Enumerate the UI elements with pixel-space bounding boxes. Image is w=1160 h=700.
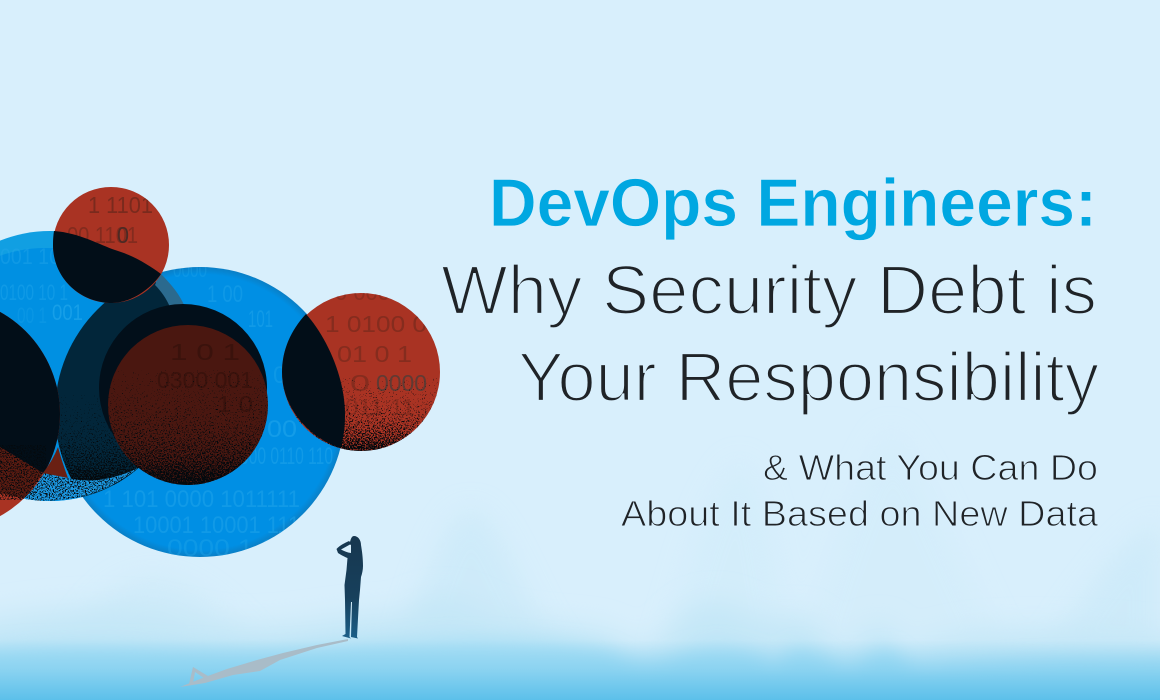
title [441,165,1099,416]
binary digits on big blue: 10001 10001 111 [133,512,300,539]
top red circle: 00 1101 [67,222,138,248]
left blue circle [0,231,105,501]
right red circle: 0000 [376,370,427,396]
figure shadow [180,639,348,687]
far left red circle [0,312,60,516]
big blue circle [55,267,345,557]
heading line 2: Why Security Debt is [441,251,1097,329]
binary digits on left blue [0,248,82,323]
subtitle line 1: & What You Can Do [763,447,1098,488]
top red circle [53,187,169,303]
top red circle: 1 1101 [88,192,153,218]
binary digits on left blue: 001 10 [0,244,60,269]
small red sliver [43,447,68,478]
binary digits on big blue: 101 [248,306,273,333]
binary digits on big blue: 1 00 [207,281,243,308]
binary digits on big blue: 000 0110 110 [240,443,333,470]
binary digits on big blue: 00 [267,416,297,443]
ground mist waves [0,599,1160,700]
centre dark shadow circle [99,304,267,435]
subtitle [621,447,1099,534]
subtitle line 2: About It Based on New Data [621,493,1099,534]
binary digits on left blue: 0100 10 1 [0,280,68,305]
binary digits on big blue: 0 [273,362,286,389]
right red circle: 01 0 1 [337,341,412,367]
circle cluster [0,187,442,562]
right red circle [282,293,440,451]
right red circle: 0 [350,370,370,396]
binary digits on left blue: 00 1 [17,303,47,328]
binary digits on big blue: 0000 [173,260,207,282]
faint misty mountains [60,430,1160,660]
right red circle: 011 11 [345,394,415,420]
binary digits on big blue [103,260,333,562]
digit accent: 0 [117,222,129,248]
binary digits on big blue: 0000 1 0 [167,535,277,562]
right red circle: 1 0100 0 [325,311,427,337]
binary digits on big blue: 1 101 0000 1011111 [103,486,300,513]
heading line 3: Your Responsibility [518,338,1099,416]
centre red circle: 1 0 1 [170,339,240,365]
stipple on overlap [58,395,138,485]
binary digits on left blue: 001 [52,300,83,325]
textured sliver of overlap [155,273,185,307]
centre red circle: 0300 001 [157,367,253,393]
right red circle: 0 000 [335,279,390,305]
heading line 1: DevOps Engineers: [489,165,1097,241]
woman silhouette [336,536,363,638]
blue stippled lower rim [25,468,138,501]
centre red circle [108,325,268,485]
dark overlap of blue circles [57,282,170,497]
centre red circle: 1 0 [217,391,253,417]
ground gradient [0,640,1160,700]
